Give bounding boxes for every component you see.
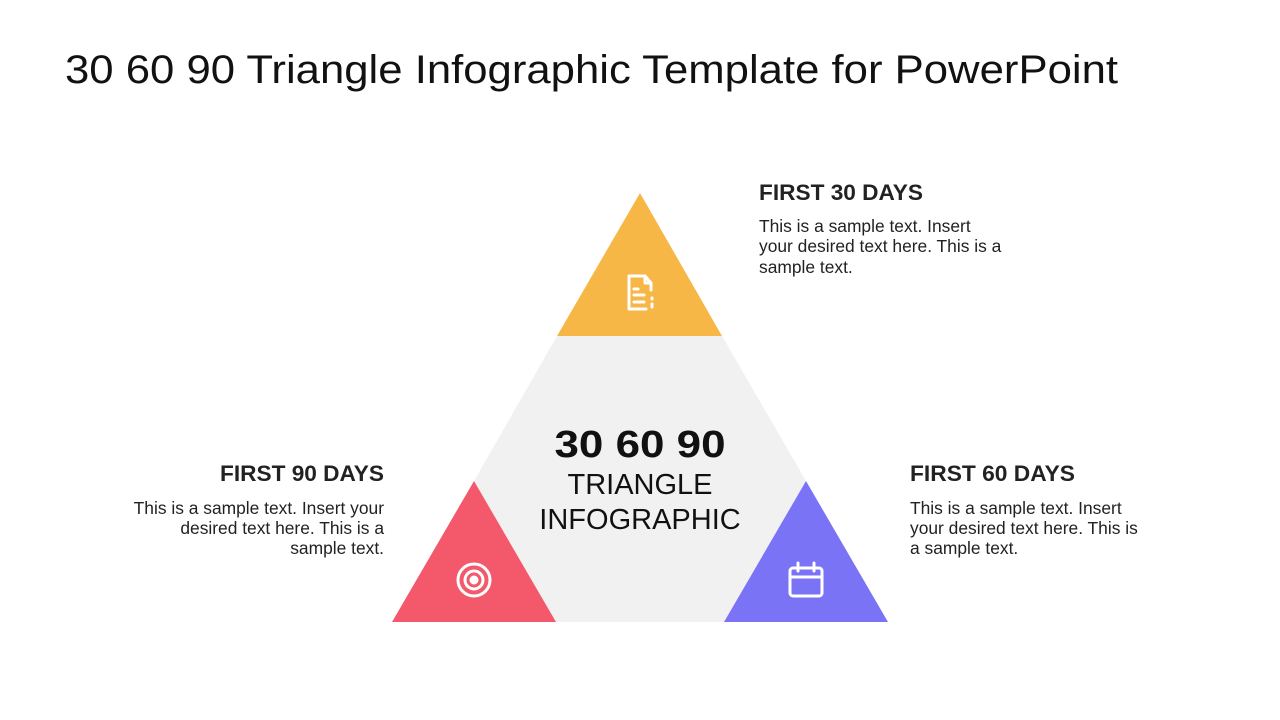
text block: first 90 days: This is a sample text. Insert your (134, 498, 384, 518)
text block: first 30 days: FIRST 30 DAYS (759, 180, 923, 205)
icon: document (629, 276, 652, 309)
icon: target (458, 564, 490, 596)
triangle: first 60 days (724, 481, 888, 622)
text block: first 30 days: sample text. (759, 257, 853, 277)
triangle: first 90 days (392, 481, 556, 622)
center label: TRIANGLE (567, 469, 713, 501)
text block: first 90 days (134, 461, 384, 558)
text block: first 90 days: sample text. (290, 538, 384, 558)
text block: first 60 days: This is a sample text. Insert (910, 498, 1122, 518)
text block: first 90 days: desired text here. This is a (180, 518, 384, 538)
center label: INFOGRAPHIC (539, 504, 741, 536)
text block: first 30 days: your desired text here. This is a (759, 236, 1002, 256)
text block: first 30 days (759, 180, 1002, 277)
text block: first 60 days: FIRST 60 DAYS (910, 461, 1075, 486)
triangle: first 30 days (557, 193, 722, 336)
text block: first 60 days: your desired text here. This is (910, 518, 1138, 538)
text block: first 90 days: FIRST 90 DAYS (220, 461, 384, 486)
center label (539, 424, 741, 536)
text block: first 60 days: a sample text. (910, 538, 1018, 558)
icon: calendar (790, 563, 822, 596)
text block: first 30 days: This is a sample text. Insert (759, 216, 971, 236)
text block: first 60 days (910, 461, 1138, 558)
title: 30 60 90 Triangle Infographic Template for PowerPoint (65, 48, 1118, 92)
panel: central triangle (474, 336, 806, 622)
center label: 30 60 90 (554, 424, 726, 466)
